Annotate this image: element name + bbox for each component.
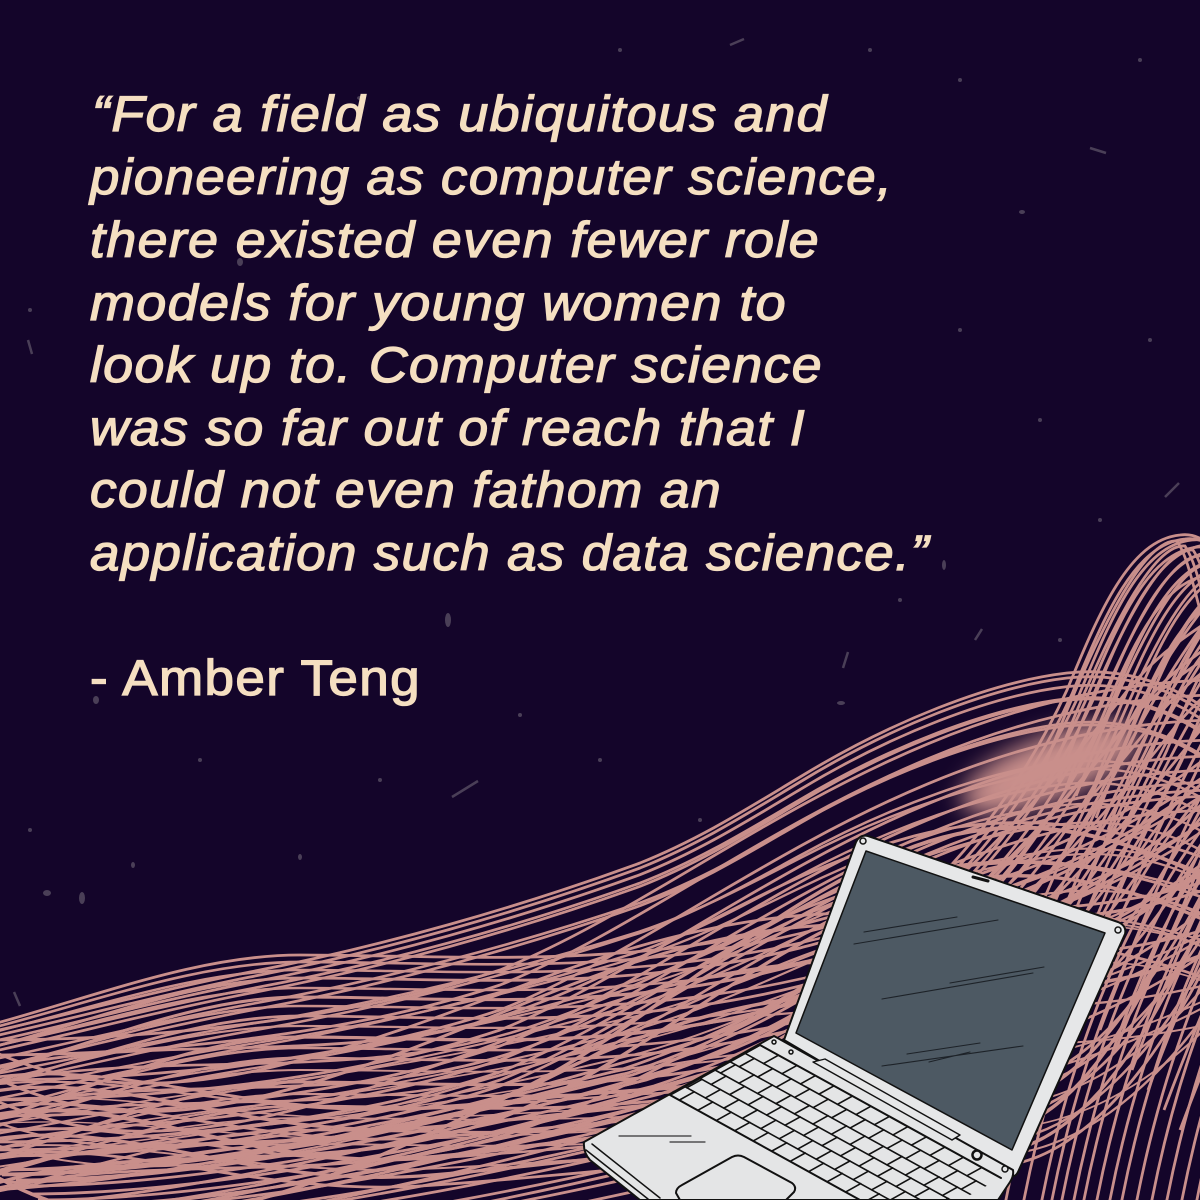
- webcam slot: [973, 877, 988, 881]
- palm rest marks: [619, 1136, 705, 1142]
- power button and screws: [772, 838, 1121, 1172]
- quote text: there existed even fewer role: [90, 212, 820, 268]
- flowing pink strands: [0, 533, 1200, 1200]
- laptop lid: [784, 836, 1125, 1176]
- laptop base: [584, 1036, 1013, 1200]
- attribution: - Amber Teng: [90, 650, 421, 706]
- quote text: look up to. Computer science: [90, 337, 823, 393]
- quote text: was so far out of reach that I: [90, 400, 806, 456]
- quote text: application such as data science.”: [90, 525, 931, 581]
- keyboard frame: [670, 1045, 1001, 1200]
- laptop screen: [796, 851, 1105, 1150]
- trackpad: [676, 1156, 795, 1200]
- quote text: [88, 86, 931, 581]
- quote text: models for young women to: [90, 275, 787, 331]
- quote text: could not even fathom an: [90, 462, 722, 518]
- quote text: pioneering as computer science,: [88, 149, 893, 205]
- laptop illustration: [584, 836, 1125, 1200]
- keyboard: [679, 1045, 1001, 1200]
- background grain speckles: [14, 39, 1179, 1006]
- quote text: “For a field as ubiquitous and: [92, 86, 829, 142]
- screen glare lines: [854, 917, 1044, 1066]
- hinge bar: [813, 1059, 960, 1140]
- base front edge: [586, 1144, 660, 1199]
